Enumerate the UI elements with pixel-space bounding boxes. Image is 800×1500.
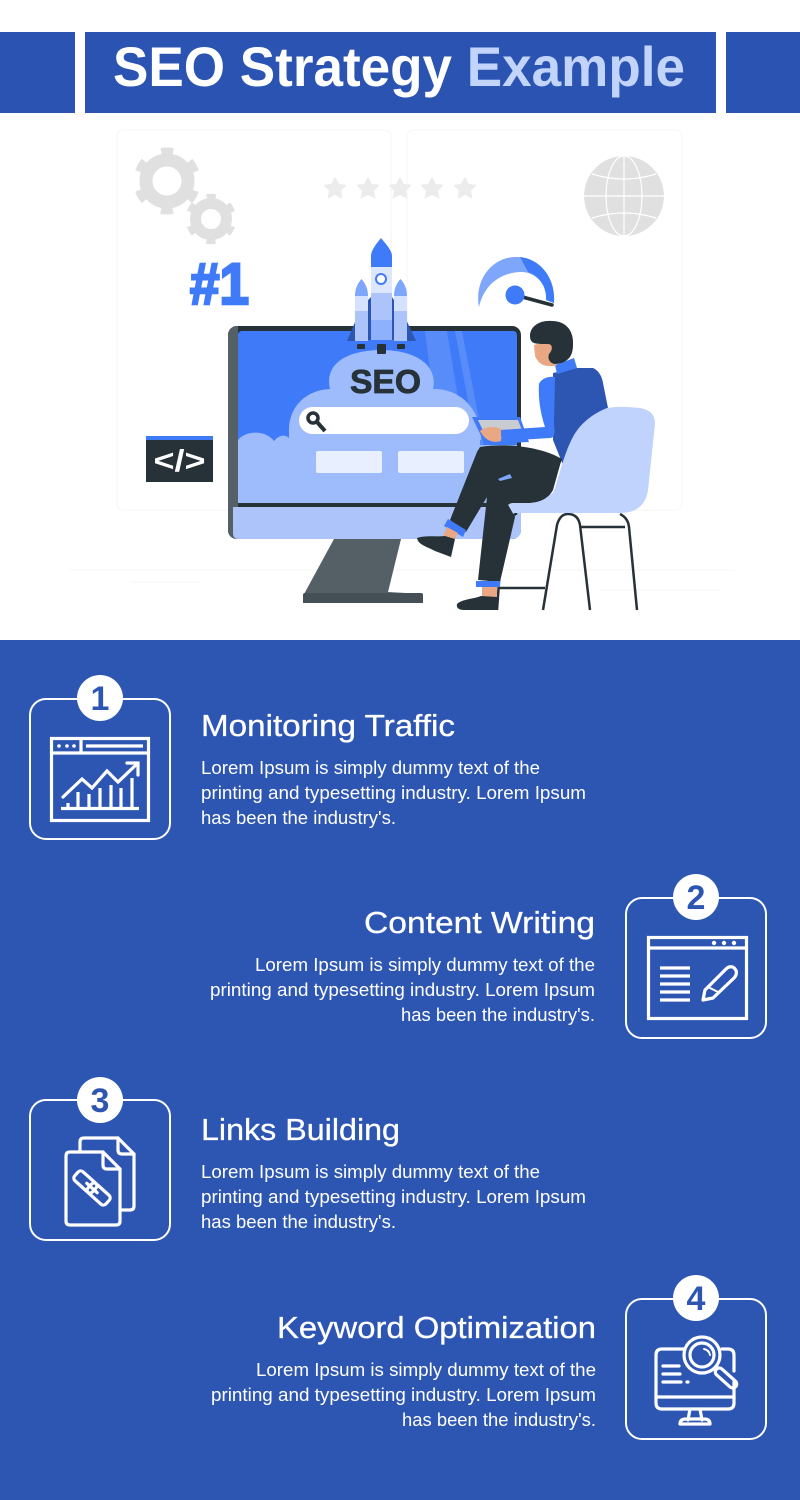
vest <box>553 368 608 465</box>
icon card 4 <box>626 1275 766 1439</box>
description: Lorem Ipsum is simply dummy text of the <box>255 954 595 975</box>
description <box>201 1161 586 1232</box>
description <box>211 1359 596 1430</box>
hair <box>530 321 573 364</box>
rocket <box>347 238 416 354</box>
description: has been the industry's. <box>401 1004 595 1025</box>
sleeve <box>500 377 555 441</box>
faint background cards <box>70 130 735 590</box>
description: has been the industry's. <box>201 1211 396 1232</box>
heading: Keyword Optimization <box>277 1310 596 1345</box>
person torso <box>472 321 608 465</box>
step 4: keyword optimization <box>211 1275 766 1439</box>
code badge: </> <box>154 443 206 478</box>
description: Lorem Ipsum is simply dummy text of the <box>201 757 540 778</box>
search bar <box>299 407 469 434</box>
description: has been the industry's. <box>201 807 396 828</box>
icon card 1: 1 <box>91 680 109 718</box>
person legs <box>417 445 562 610</box>
heading: Monitoring Traffic <box>201 708 455 743</box>
description: printing and typesetting industry. Lorem Ipsum <box>210 979 595 1000</box>
icon: globe <box>584 156 664 236</box>
icon: rating stars <box>325 178 475 198</box>
face <box>534 340 556 366</box>
screen buttons <box>316 451 464 473</box>
description: printing and typesetting industry. Lorem Ipsum <box>201 782 586 803</box>
code badge <box>146 436 213 482</box>
icon: gears <box>126 140 242 250</box>
shirt <box>528 441 560 452</box>
description: Lorem Ipsum is simply dummy text of the <box>256 1359 596 1380</box>
clouds on screen <box>238 350 517 503</box>
icon card 3: 3 <box>91 1082 109 1120</box>
SEO label: SEO <box>350 363 421 400</box>
description: printing and typesetting industry. Lorem Ipsum <box>211 1384 596 1405</box>
step 2: content writing <box>210 874 766 1038</box>
step 3: links building <box>30 1077 586 1240</box>
icon card 1 <box>30 675 170 839</box>
description <box>201 757 586 828</box>
cuffs <box>444 519 466 537</box>
heading: Content Writing <box>364 905 595 940</box>
icon card 2: 2 <box>687 879 705 917</box>
title text: SEO Strategy Example <box>113 35 685 98</box>
icon card 3 <box>30 1077 170 1240</box>
icon card 2 <box>626 874 766 1038</box>
rank label: #1 <box>190 252 249 317</box>
description <box>210 954 595 1025</box>
blue content panel <box>0 640 800 1500</box>
step 1: monitoring traffic <box>30 675 586 839</box>
chair <box>497 407 655 610</box>
laptop <box>472 417 529 444</box>
shoes <box>417 536 455 557</box>
ankles <box>443 527 458 541</box>
icon card 4: 4 <box>687 1280 706 1318</box>
description: has been the industry's. <box>402 1409 596 1430</box>
monitor <box>228 326 521 603</box>
title banner <box>0 32 800 113</box>
description: printing and typesetting industry. Lorem Ipsum <box>201 1186 586 1207</box>
hand <box>480 427 501 442</box>
icon: speed gauge <box>478 257 554 307</box>
description: Lorem Ipsum is simply dummy text of the <box>201 1161 540 1182</box>
hero illustration <box>70 130 735 610</box>
heading: Links Building <box>201 1112 400 1147</box>
collar <box>555 358 577 374</box>
